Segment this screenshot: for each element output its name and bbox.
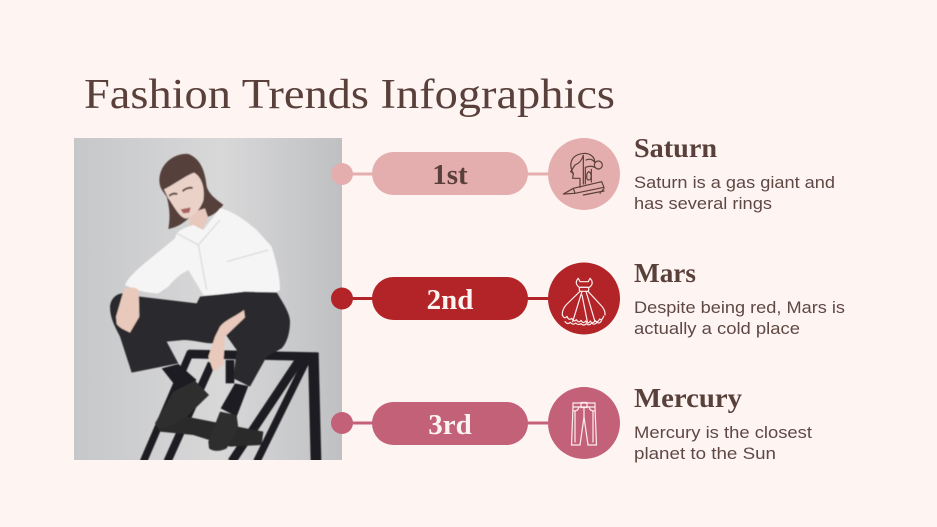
row 1: connector, pill and dot (331, 152, 548, 195)
neck (188, 208, 208, 230)
icon: trousers (548, 387, 620, 459)
row 1 text (634, 133, 835, 213)
row 1: connector, pill and dot: 1st (432, 159, 468, 191)
row 2 text: Despite being red, Mars is (634, 298, 845, 317)
photo: model seated on a black step stool (74, 138, 342, 462)
row 3 text (634, 383, 812, 463)
row 2: connector, pill and dot: 2nd (427, 284, 473, 316)
row 3 text: Mercury is the closest (634, 423, 812, 442)
stool (143, 352, 318, 462)
face (164, 173, 204, 218)
icon: ball gown dress (548, 262, 620, 334)
shoes (155, 381, 209, 428)
row 3 text: Mercury (634, 383, 743, 413)
socks (162, 364, 197, 392)
row 3 text: planet to the Sun (634, 444, 776, 463)
row 2: connector, pill and dot (331, 277, 548, 320)
trousers (110, 292, 290, 387)
title: Fashion Trends Infographics (84, 72, 615, 118)
icon: woman with pencil (548, 138, 620, 210)
row 2 text: Mars (634, 258, 696, 288)
hands (116, 287, 139, 333)
row 1 text: Saturn (634, 133, 717, 163)
row 1 text: has several rings (634, 194, 772, 213)
row 2 text: actually a cold place (634, 319, 800, 338)
shirt (125, 208, 280, 296)
row 3: connector, pill and dot: 3rd (428, 409, 472, 441)
row 2 text (634, 258, 845, 338)
row 1 text: Saturn is a gas giant and (634, 173, 835, 192)
hair (159, 154, 223, 229)
row 3: connector, pill and dot (331, 402, 548, 445)
